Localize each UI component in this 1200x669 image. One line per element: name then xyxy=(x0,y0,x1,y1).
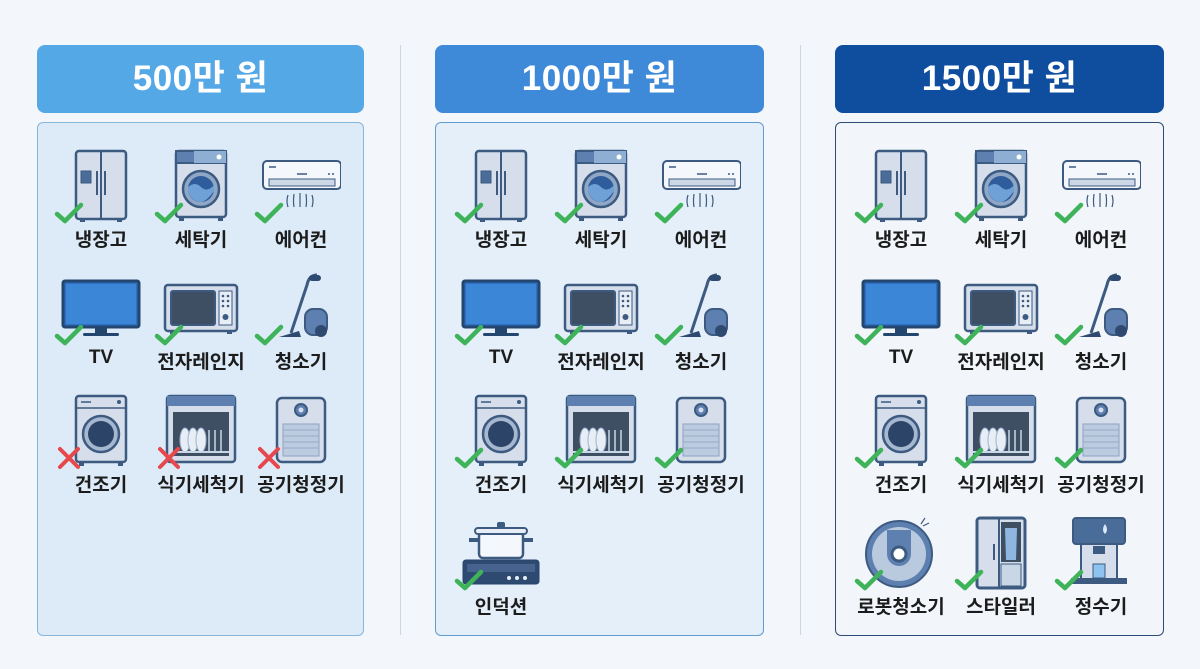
item: 공기청정기 xyxy=(654,396,745,496)
header: 1000만 원: 1000만 원 xyxy=(522,59,677,98)
item: 냉장고: 냉장고 xyxy=(475,230,527,251)
item: 식기세척기: 식기세척기 xyxy=(957,475,1045,496)
item: 정수기 xyxy=(1054,517,1127,618)
item: 인덕션: 인덕션 xyxy=(475,597,527,618)
item: 에어컨 xyxy=(254,160,341,251)
item: 청소기: 청소기 xyxy=(675,352,727,373)
header: 1000만 원 xyxy=(435,45,764,113)
item: TV xyxy=(454,280,540,368)
item: 세탁기: 세탁기 xyxy=(975,230,1027,251)
item: 전자레인지 xyxy=(154,284,245,373)
item: 에어컨: 에어컨 xyxy=(675,230,727,251)
item: 냉장고 xyxy=(454,150,528,251)
item: 건조기 xyxy=(454,394,528,496)
item: 공기청정기 (no) xyxy=(257,396,345,496)
item: 건조기 xyxy=(854,394,928,496)
item: 공기청정기 xyxy=(1054,396,1145,496)
item: 에어컨 xyxy=(1054,160,1141,251)
item: 건조기: 건조기 xyxy=(875,475,927,496)
item: 건조기 (no) xyxy=(58,394,128,496)
item: 전자레인지 xyxy=(554,284,645,373)
item: 냉장고: 냉장고 xyxy=(75,230,127,251)
item: 세탁기: 세탁기 xyxy=(575,230,627,251)
item: 전자레인지: 전자레인지 xyxy=(957,352,1045,373)
item: 냉장고 xyxy=(854,150,928,251)
item: 공기청정기 (no): 공기청정기 xyxy=(257,475,345,496)
item: 청소기 xyxy=(654,274,728,373)
item: 냉장고 xyxy=(54,150,128,251)
header: 500만 원: 500만 원 xyxy=(133,59,268,98)
item: 청소기: 청소기 xyxy=(275,352,327,373)
item: 스타일러 xyxy=(954,516,1036,618)
item: 로봇청소기 xyxy=(854,518,945,618)
item: 전자레인지: 전자레인지 xyxy=(557,352,645,373)
item: 전자레인지: 전자레인지 xyxy=(157,352,245,373)
item: TV: TV xyxy=(89,347,113,368)
item: 전자레인지 xyxy=(954,284,1045,373)
header: 500만 원 xyxy=(37,45,364,113)
item: 청소기 xyxy=(1054,274,1128,373)
item: 냉장고: 냉장고 xyxy=(875,230,927,251)
item: 건조기: 건조기 xyxy=(475,475,527,496)
item: 세탁기 xyxy=(954,150,1028,251)
item: 에어컨: 에어컨 xyxy=(275,230,327,251)
panel: 1500만 원 xyxy=(835,122,1164,636)
item: TV: TV xyxy=(889,347,913,368)
item: 청소기: 청소기 xyxy=(1075,352,1127,373)
item: 세탁기 xyxy=(154,150,228,251)
item: 세탁기: 세탁기 xyxy=(175,230,227,251)
item: 에어컨: 에어컨 xyxy=(1075,230,1127,251)
item: 세탁기 xyxy=(554,150,628,251)
panel: 500만 원 xyxy=(37,122,364,636)
item: 식기세척기 xyxy=(954,394,1045,496)
item: TV: TV xyxy=(489,347,513,368)
item: 스타일러: 스타일러 xyxy=(966,597,1036,618)
item: TV xyxy=(854,280,940,368)
item: 에어컨 xyxy=(654,160,741,251)
item: 로봇청소기: 로봇청소기 xyxy=(857,597,945,618)
item: 공기청정기: 공기청정기 xyxy=(1057,475,1145,496)
item: 식기세척기 (no) xyxy=(157,394,245,496)
header: 1500만 원 xyxy=(835,45,1164,113)
item: 정수기: 정수기 xyxy=(1075,597,1127,618)
item: 식기세척기 (no): 식기세척기 xyxy=(157,475,245,496)
panel: 1000만 원 xyxy=(435,122,764,636)
item: 청소기 xyxy=(254,274,328,373)
item: 식기세척기 xyxy=(554,394,645,496)
item: 인덕션 xyxy=(454,522,540,618)
item: 건조기 (no): 건조기 xyxy=(75,475,127,496)
header: 1500만 원: 1500만 원 xyxy=(922,59,1077,98)
item: TV xyxy=(54,280,140,368)
item: 식기세척기: 식기세척기 xyxy=(557,475,645,496)
item: 공기청정기: 공기청정기 xyxy=(657,475,745,496)
